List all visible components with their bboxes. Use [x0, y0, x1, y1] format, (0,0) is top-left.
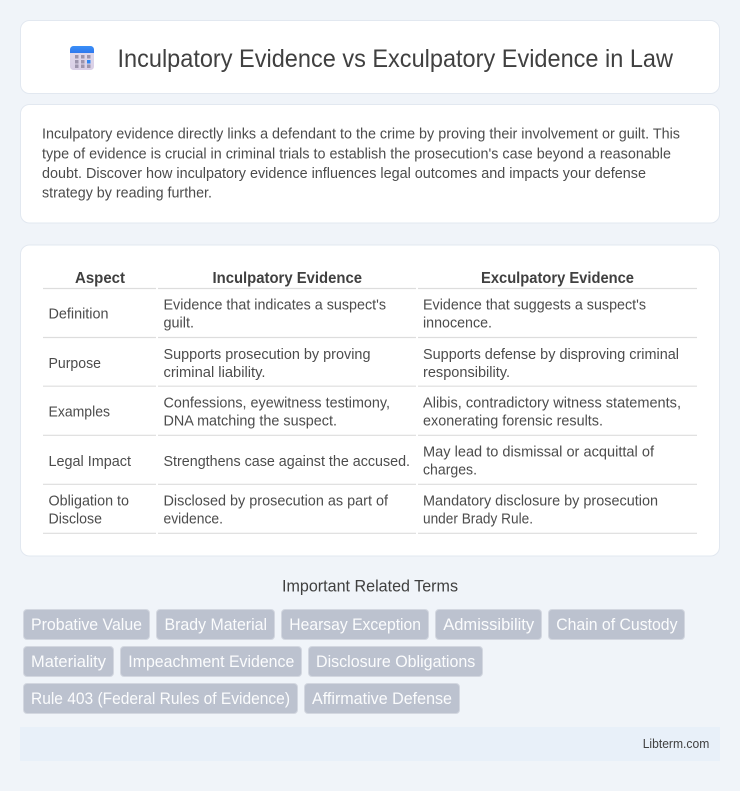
table row: legal impact	[43, 445, 697, 484]
title: Inculpatory Evidence vs Exculpatory Evidence in Law	[118, 45, 674, 73]
table row: purpose: Supports defense by disproving criminal	[423, 347, 679, 363]
panel: page header	[20, 20, 720, 94]
text block: introduction paragraph	[42, 126, 680, 202]
tag: Brady Material	[156, 610, 274, 640]
table row: purpose: Supports prosecution by proving	[164, 347, 370, 363]
tag: Hearsay Exception: Hearsay Exception	[289, 615, 421, 634]
table header row: Inculpatory Evidence	[212, 270, 362, 287]
table row: definition: Definition	[48, 307, 108, 323]
tag: Probative Value: Probative Value	[31, 615, 142, 634]
heading: related terms: Important Related Terms	[282, 578, 458, 596]
table row: definition	[43, 298, 697, 338]
table header row: Aspect	[75, 270, 125, 287]
table row: examples: DNA matching the suspect.	[164, 414, 337, 430]
footer	[20, 727, 720, 761]
tag: Rule 403	[24, 684, 298, 714]
icon: calendar	[70, 46, 94, 70]
tag: Brady Material: Brady Material	[164, 615, 267, 634]
tag: Materiality	[24, 646, 114, 676]
text block: introduction paragraph: doubt. Discover how inculpatory evidence influences legal outcomes and impacts your defense	[42, 165, 646, 182]
table row: legal impact: Legal Impact	[48, 454, 131, 470]
text block: introduction paragraph: type of evidence is crucial in criminal trials to establish the prosecution's case beyond a reasonable	[42, 145, 671, 162]
table row: legal impact: charges.	[423, 463, 477, 479]
table row: obligation to disclose: Disclose	[48, 512, 102, 528]
footer credit: Libterm.com	[643, 737, 709, 751]
table row: definition: guilt.	[164, 316, 194, 332]
text block: introduction paragraph: strategy by reading further.	[42, 184, 212, 202]
table row: obligation to disclose: Mandatory disclosure by prosecution	[423, 494, 658, 510]
table row: legal impact: May lead to dismissal or acquittal of	[423, 445, 655, 461]
tag: Admissibility	[436, 610, 542, 640]
table row: purpose	[43, 347, 697, 386]
tag: Materiality: Materiality	[31, 652, 107, 671]
panel: comparison table	[20, 245, 720, 556]
tag: Rule 403: Rule 403 (Federal Rules of Evidence)	[31, 689, 290, 708]
table row: definition: innocence.	[423, 316, 492, 332]
table header row	[43, 270, 697, 288]
table row: obligation to disclose: Obligation to	[48, 494, 129, 510]
text block: introduction paragraph: Inculpatory evidence directly links a defendant to the crime by proving their involvement or guilt. This	[42, 126, 680, 143]
tag: Disclosure Obligations	[308, 646, 482, 676]
table row: examples: Confessions, eyewitness testimony,	[164, 396, 390, 412]
table row: definition: Evidence that indicates a suspect's	[164, 298, 386, 314]
table row: examples: Alibis, contradictory witness statements,	[423, 396, 681, 412]
table row: obligation to disclose	[43, 494, 697, 533]
tag: Hearsay Exception	[282, 610, 428, 640]
panel: related term tags	[24, 610, 684, 714]
table row: purpose: responsibility.	[423, 365, 510, 381]
table row: obligation to disclose: evidence.	[164, 512, 223, 528]
table row: purpose: Purpose	[48, 356, 101, 372]
tag: Chain of Custody: Chain of Custody	[556, 615, 678, 634]
table row: examples: Examples	[48, 405, 110, 421]
table row: obligation to disclose: under Brady Rule.	[423, 512, 533, 528]
table row: legal impact: Strengthens case against the accused.	[164, 454, 410, 470]
panel: introduction	[20, 104, 720, 223]
table row: obligation to disclose: Disclosed by prosecution as part of	[164, 494, 389, 510]
table row: purpose: criminal liability.	[164, 365, 266, 381]
table row: examples: exonerating forensic results.	[423, 414, 603, 430]
tag: Affirmative Defense: Affirmative Defense	[312, 689, 452, 708]
tag: Impeachment Evidence	[120, 646, 302, 676]
tag: Chain of Custody	[548, 610, 684, 640]
tag: Probative Value	[24, 610, 150, 640]
tag: Impeachment Evidence: Impeachment Evidence	[128, 652, 294, 671]
tag: Admissibility: Admissibility	[443, 615, 535, 634]
table row: definition: Evidence that suggests a suspect's	[423, 298, 646, 314]
table header row: Exculpatory Evidence	[481, 270, 634, 287]
tag: Affirmative Defense	[304, 684, 460, 714]
tag: Disclosure Obligations: Disclosure Obligations	[316, 652, 475, 671]
table row: examples	[43, 396, 697, 435]
